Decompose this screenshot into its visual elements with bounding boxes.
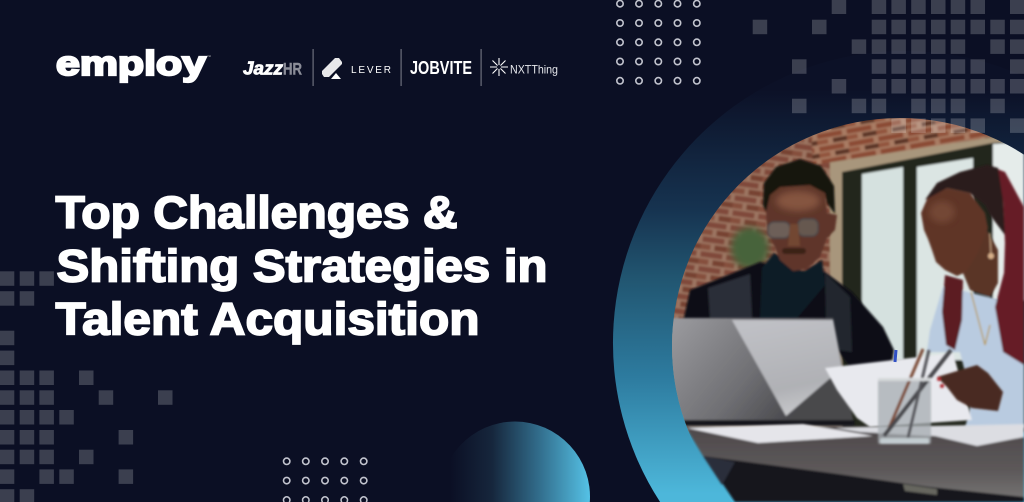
logo: employ: ™ <box>207 54 211 59</box>
logo: NXTThing: NXTThing <box>510 62 558 76</box>
title: Talent Acquisition <box>56 294 480 344</box>
pixel grid: bottom left <box>0 271 172 502</box>
logo: employ: employ <box>56 45 206 83</box>
document in hand <box>825 353 972 427</box>
dot grid: top <box>617 0 700 84</box>
logo: Lever <box>322 58 391 79</box>
logo: JazzHR <box>243 58 302 78</box>
photo background wall and window <box>665 112 1024 432</box>
logo: NXTThing <box>490 58 558 76</box>
woman <box>921 165 1024 428</box>
icon: NXTThing star <box>490 58 508 76</box>
icon: Lever mark <box>322 58 342 79</box>
title: Shifting Strategies in <box>56 240 548 291</box>
pixel grid: top right <box>753 0 1024 133</box>
divider <box>400 49 402 86</box>
logo: JazzHR: Jazz <box>243 58 283 78</box>
hand <box>937 365 1003 411</box>
title: Top Challenges & <box>56 187 458 238</box>
divider <box>480 49 482 86</box>
divider <box>312 49 314 86</box>
pencil cup <box>878 349 951 444</box>
photo: two colleagues reviewing documents <box>665 112 1024 502</box>
laptop <box>668 318 854 426</box>
logo: Lever: LEVER <box>351 65 391 76</box>
blue pen <box>895 350 896 362</box>
logo: Jobvite: JOBVITE <box>410 58 472 78</box>
decorative gradient circle <box>440 422 590 502</box>
decorative crescent <box>613 51 1024 502</box>
man <box>683 159 894 368</box>
table with papers <box>685 424 1024 502</box>
dot grid: bottom <box>284 458 367 502</box>
logo: JazzHR: HR <box>283 60 302 78</box>
title <box>56 187 548 344</box>
